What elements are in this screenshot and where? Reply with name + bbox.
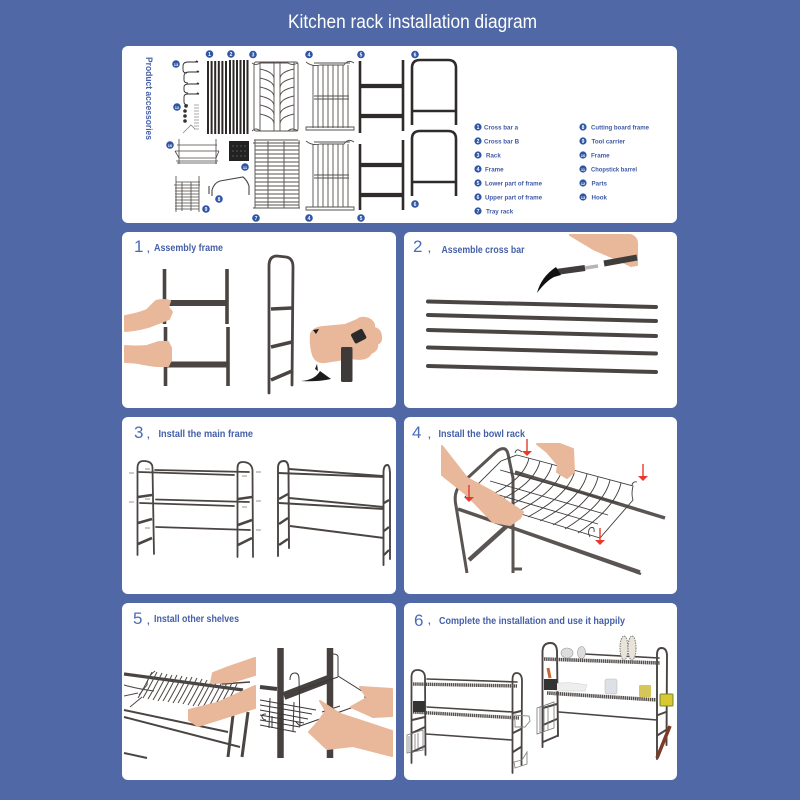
part 4: frame lower bbox=[306, 140, 354, 210]
orange utensil bbox=[548, 668, 550, 678]
part 6: upper frame bottom bbox=[412, 131, 456, 196]
curved arrow bbox=[301, 329, 331, 381]
red arrows bbox=[464, 439, 648, 545]
callout number 13: 13 bbox=[174, 62, 179, 67]
legend: right column: Cutting board frame bbox=[591, 124, 650, 132]
callout number 4 bbox=[305, 51, 313, 58]
step 4 heading: , bbox=[428, 430, 431, 441]
callout number 4 lower bbox=[305, 214, 313, 222]
upper hand bbox=[537, 444, 574, 478]
step 4 heading: Install the bowl rack bbox=[438, 429, 525, 440]
frame being assembled bbox=[164, 269, 228, 386]
callout number 8 bbox=[215, 195, 223, 203]
right scene: upper hand bbox=[351, 687, 392, 717]
hand holding lower frame bbox=[125, 342, 171, 366]
callout number 5: 5 bbox=[360, 52, 363, 58]
step 3 heading: , bbox=[147, 430, 150, 441]
rack frame structure bbox=[455, 449, 665, 574]
step 6 heading: Complete the installation and use it happily bbox=[439, 616, 625, 627]
panel: step 2 assemble cross bar bbox=[404, 232, 677, 408]
plates bbox=[561, 636, 636, 660]
detergent bottle bbox=[639, 685, 651, 697]
part 1: cross bars a bbox=[208, 61, 226, 134]
callout number 5 lower bbox=[357, 214, 365, 222]
curved arrow bbox=[537, 267, 561, 293]
legend: left column bbox=[474, 123, 543, 216]
part 11: chopstick barrel bbox=[229, 141, 249, 161]
step 3 heading bbox=[134, 423, 253, 442]
exploded frame right bbox=[238, 462, 253, 557]
part 3: rack bbox=[252, 62, 298, 131]
callout number 7: 7 bbox=[255, 216, 258, 222]
legend: left column: 6 bbox=[477, 195, 480, 201]
heading: product accessories: Product accessories bbox=[144, 57, 154, 140]
callout number 1 bbox=[206, 50, 213, 58]
step 2 heading: Assemble cross bar bbox=[442, 245, 525, 256]
legend: left column: Frame bbox=[485, 166, 504, 174]
callout number 1: 1 bbox=[208, 52, 211, 58]
left scene: rack bars and posts bbox=[124, 674, 250, 758]
part 12: fittings bbox=[183, 104, 199, 133]
step 4 heading bbox=[412, 423, 525, 442]
bowl rack wires bbox=[465, 450, 637, 538]
left scene: upper arm bbox=[211, 658, 255, 683]
callout number 6 lower: 6 bbox=[414, 202, 417, 208]
black tube bbox=[341, 347, 352, 382]
part 4: frame upper bbox=[306, 61, 354, 130]
legend: right column: Parts bbox=[592, 180, 608, 188]
legend: right column: Hook bbox=[592, 194, 608, 202]
step 3 heading: Install the main frame bbox=[158, 429, 253, 440]
legend: left column: 7 bbox=[477, 209, 480, 215]
rod being connected bbox=[556, 258, 637, 272]
glass cup bbox=[605, 679, 617, 694]
callout number 2: 2 bbox=[230, 52, 233, 58]
panel: step 1 assembly frame bbox=[122, 232, 396, 408]
cutting board bbox=[657, 726, 670, 758]
callout number 3 bbox=[249, 51, 257, 58]
callout number 6: 6 bbox=[414, 52, 417, 58]
part 5: lower frame top bbox=[360, 60, 403, 133]
legend: right column: Frame bbox=[591, 152, 610, 160]
callout number 4: 4 bbox=[308, 52, 311, 58]
loaded finished rack bbox=[537, 636, 673, 759]
step 6 heading: 6 bbox=[414, 611, 423, 630]
callout number 4 lower: 4 bbox=[308, 216, 311, 222]
left scene: dish rack wires bbox=[124, 671, 237, 710]
callout number 8: 8 bbox=[218, 197, 221, 203]
legend: left column: Upper part of frame bbox=[485, 194, 543, 202]
step 5 heading: 5 bbox=[133, 609, 142, 628]
callout number 6 lower bbox=[411, 200, 419, 208]
small bar labels bbox=[129, 469, 261, 530]
step 1 heading bbox=[134, 237, 223, 256]
right scene: wire basket bbox=[260, 654, 365, 732]
legend: left column: 5 bbox=[477, 181, 480, 187]
legend: right column: 9 bbox=[582, 139, 585, 145]
panel: step 4 install bowl rack bbox=[404, 417, 677, 594]
callout number 9 bbox=[202, 205, 210, 213]
step 2 heading: 2 bbox=[413, 237, 422, 256]
step 2 heading bbox=[413, 237, 525, 256]
callout number 6 bbox=[411, 51, 419, 58]
side basket bbox=[537, 702, 554, 734]
part 2: cross bars b bbox=[230, 60, 248, 134]
right scene: posts and beam bbox=[260, 648, 331, 758]
step 1 heading: Assembly frame bbox=[154, 243, 223, 254]
legend: right column: 10 bbox=[581, 153, 586, 158]
ladder upper frame bbox=[269, 256, 293, 393]
step 1 heading: 1 bbox=[134, 237, 143, 256]
legend: left column: 4 bbox=[477, 167, 480, 173]
panel: step 6 complete the installation bbox=[404, 603, 677, 780]
legend: right column: 13 bbox=[581, 195, 586, 200]
legend: left column: 1 bbox=[477, 125, 480, 131]
exploded cross bars bbox=[139, 470, 250, 530]
step 5 heading bbox=[133, 609, 239, 628]
legend: left column: 3 bbox=[477, 153, 480, 159]
chopstick barrel bbox=[544, 679, 557, 690]
legend: right column bbox=[579, 123, 650, 202]
step 5 heading: Install other shelves bbox=[154, 614, 239, 625]
hand with end cap bbox=[311, 318, 381, 362]
callout number 10 bbox=[166, 141, 174, 149]
legend: right column: 11 bbox=[581, 167, 586, 172]
empty finished rack bbox=[407, 670, 530, 773]
legend: left column: Cross bar B bbox=[484, 138, 520, 146]
title: Kitchen rack installation diagram bbox=[288, 12, 537, 33]
legend: right column: Tool carrier bbox=[592, 138, 626, 146]
step 1 heading: , bbox=[147, 244, 150, 255]
yellow sponge bbox=[660, 694, 673, 706]
callout number 3: 3 bbox=[252, 52, 255, 58]
part 6: upper frame top bbox=[412, 60, 456, 125]
legend: left column: Cross bar a bbox=[484, 124, 519, 132]
legend: right column: 8 bbox=[582, 125, 585, 131]
five cross bars bbox=[428, 302, 656, 372]
callout number 9: 9 bbox=[205, 207, 208, 213]
step 6 heading: , bbox=[428, 616, 431, 627]
callout number 11: 11 bbox=[243, 165, 248, 170]
step 6 heading bbox=[414, 611, 625, 630]
step 2 heading: , bbox=[428, 244, 431, 255]
callout number 11 bbox=[241, 163, 249, 171]
legend: left column: Rack bbox=[486, 152, 501, 160]
callout number 7 bbox=[252, 214, 260, 222]
part 7: tray rack bbox=[253, 140, 300, 208]
panel: step 5 install other shelves bbox=[122, 603, 396, 780]
callout number 10: 10 bbox=[168, 143, 173, 148]
legend: left column: 2 bbox=[477, 139, 480, 145]
step 5 heading: , bbox=[147, 616, 150, 627]
callout number 2 bbox=[227, 50, 235, 58]
part 9: tool carrier bbox=[174, 176, 200, 212]
legend: left column: Tray rack bbox=[486, 208, 514, 216]
right scene: lower hand bbox=[309, 701, 392, 756]
part 13: hooks bbox=[183, 61, 199, 105]
assembled frame bbox=[278, 461, 390, 565]
legend: right column: Chopstick barrel bbox=[591, 166, 637, 174]
white bowls bbox=[553, 683, 587, 691]
callout number 12 bbox=[173, 103, 181, 111]
legend: left column: Lower part of frame bbox=[485, 180, 543, 188]
hand holding upper crossbar bbox=[125, 300, 172, 331]
left scene: lower arm bbox=[189, 686, 255, 726]
callout number 5 bbox=[357, 51, 365, 58]
step 4 heading: 4 bbox=[412, 423, 421, 442]
exploded frame left bbox=[138, 461, 154, 555]
callout number 13 bbox=[172, 60, 180, 68]
step 3 heading: 3 bbox=[134, 423, 143, 442]
left arm and hand bbox=[442, 446, 523, 525]
callout number 12: 12 bbox=[175, 105, 180, 110]
part 8: cutting board frame bbox=[209, 177, 249, 196]
legend: right column: 12 bbox=[581, 181, 586, 186]
callout number 5 lower: 5 bbox=[360, 216, 363, 222]
end cap bbox=[350, 328, 367, 344]
panel: step 3 install main frame bbox=[122, 417, 396, 594]
panel: product accessories bbox=[122, 46, 677, 223]
hand with bar bbox=[570, 235, 637, 266]
part 10: frame basket bbox=[175, 139, 219, 164]
part 5: lower frame bottom bbox=[360, 140, 403, 210]
